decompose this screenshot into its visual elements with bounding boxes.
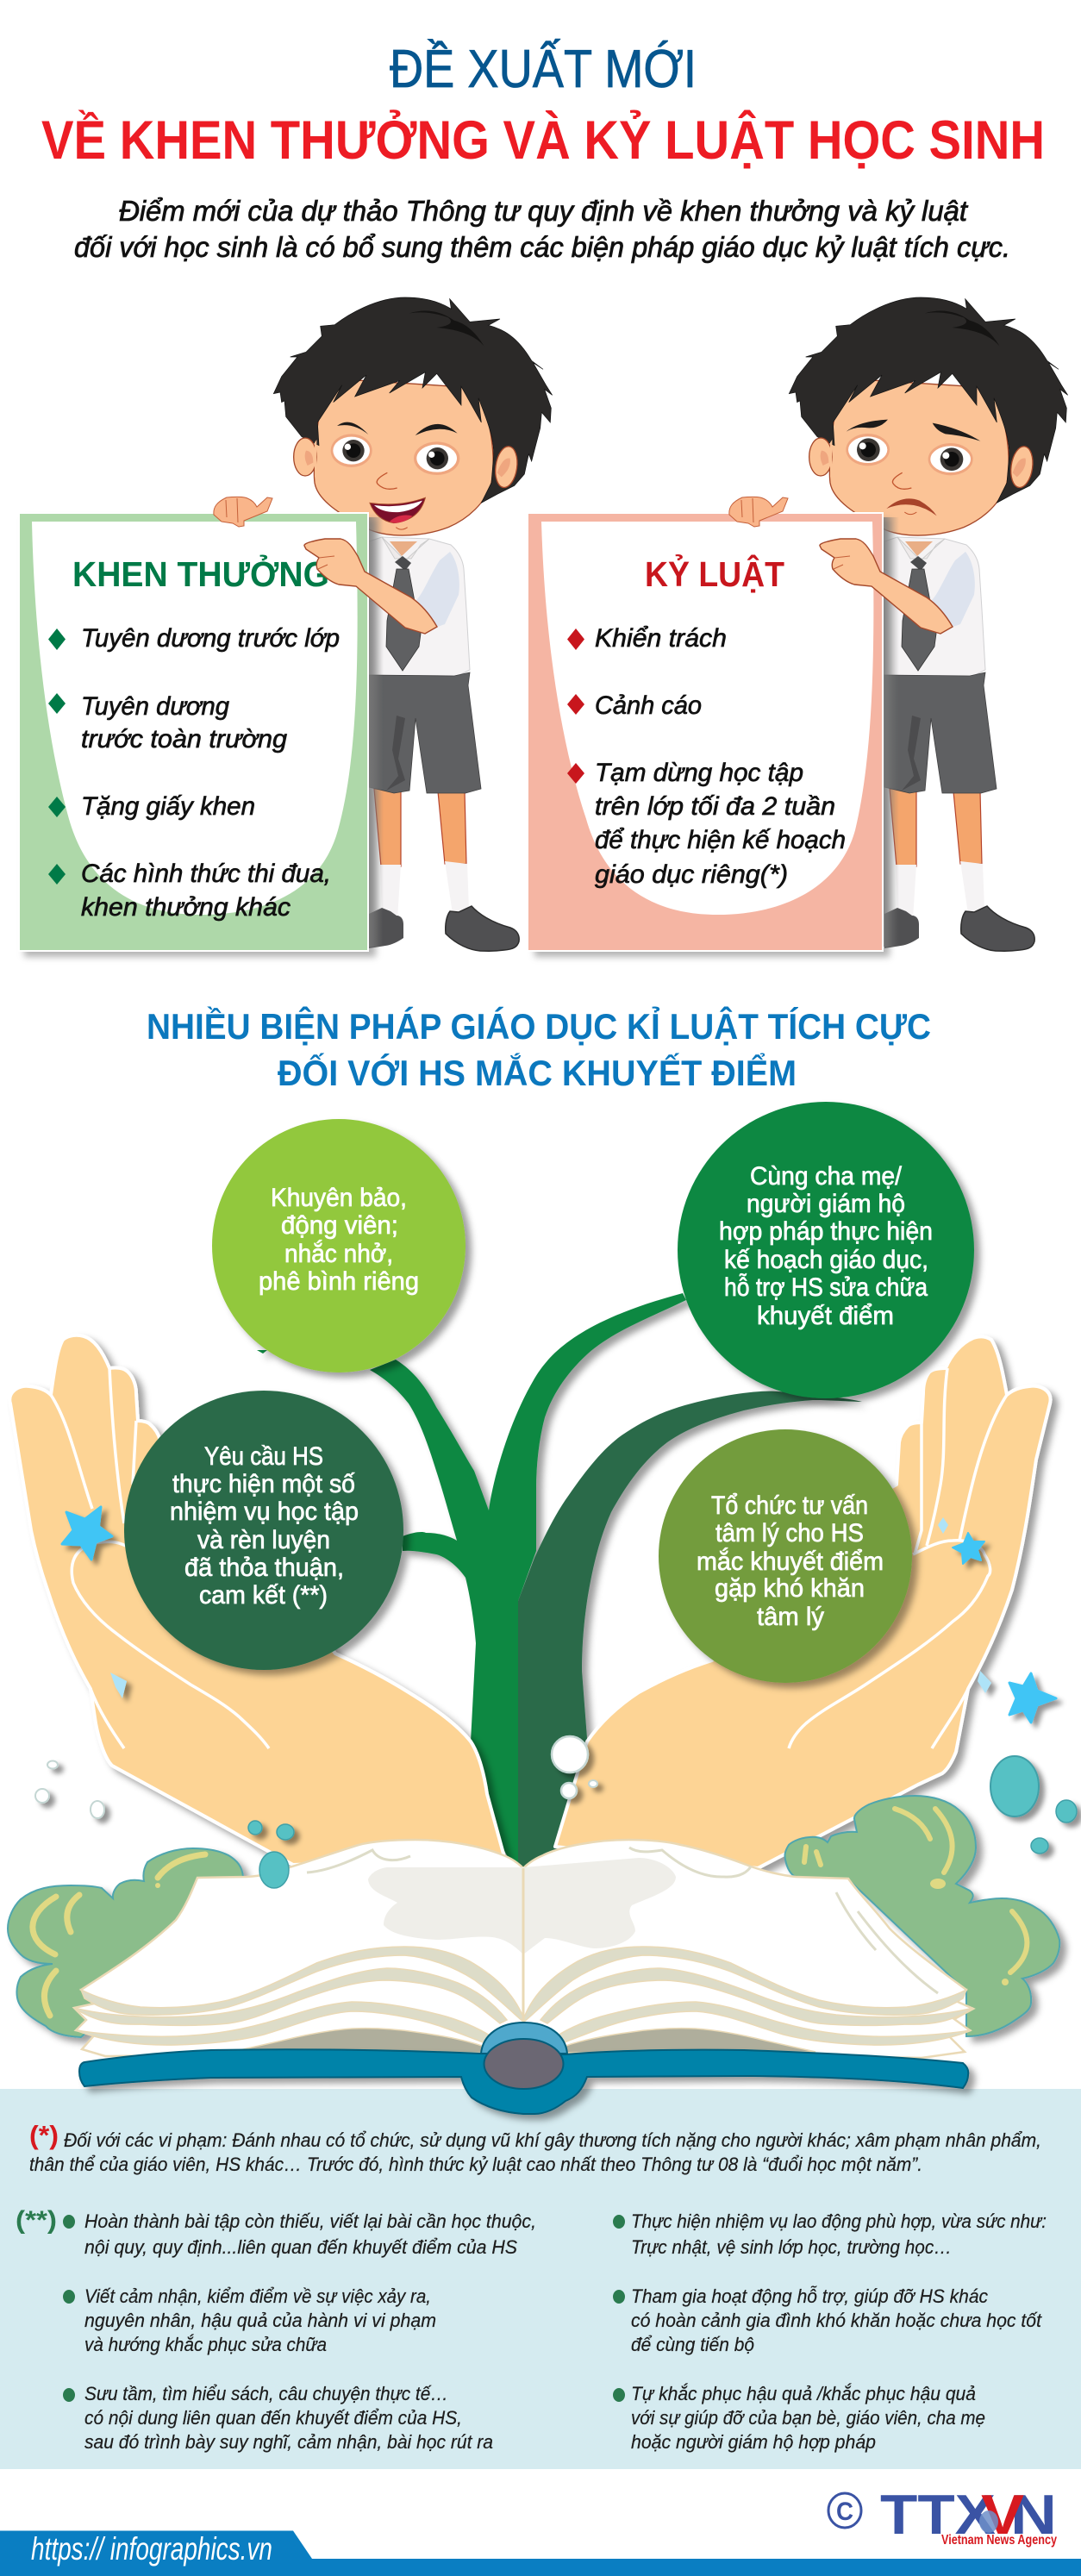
reward list: Tặng giấy khen — [81, 792, 255, 821]
boy arms holding panels — [214, 497, 953, 634]
footnote (**) right column: Trực nhật, vệ sinh lớp học, trường học… — [631, 2236, 952, 2258]
boy 2: sad student — [789, 297, 1068, 951]
circle: yeu cau HS: cam kết (**) — [199, 1581, 328, 1610]
right green cloud — [784, 1796, 1059, 2036]
reward list — [48, 624, 340, 922]
circle: cung cha me: hợp pháp thực hiện — [719, 1217, 933, 1246]
circle: khuyen bao: Khuyên bảo, — [271, 1184, 407, 1212]
discipline list — [567, 624, 846, 889]
circle: to chuc tu van: tâm lý — [757, 1603, 824, 1631]
left green cloud — [8, 1848, 243, 2037]
logo TTXVN: N — [1010, 2483, 1057, 2546]
panel heading: KỶ LUẬT — [645, 554, 784, 594]
intro text: đối với học sinh là có bổ sung thêm các biện pháp giáo dục kỷ luật tích cực. — [74, 231, 1010, 263]
footnote (**) left column: nguyên nhân, hậu quả của hành vi vi phạm — [84, 2310, 436, 2331]
footnote (**) left column: nội quy, quy định...liên quan đến khuyết điểm của HS — [84, 2236, 517, 2258]
boy 1: happy student — [273, 297, 553, 951]
circle: to chuc tu van: tâm lý cho HS — [715, 1519, 864, 1547]
footnote (**) right column — [613, 2210, 1047, 2453]
footnote (*): thân thể của giáo viên, HS khác… Trước đó, hình thức kỷ luật cao nhất theo Thông tư 08 là “đuổi học một năm”. — [29, 2154, 922, 2175]
footnote (*): Đối với các vi phạm: Đánh nhau có tổ chức, sử dụng vũ khí gây thương tích nặng cho người khác; xâm phạm nhân phẩm, — [64, 2129, 1041, 2151]
footnote background band — [0, 2089, 1081, 2469]
footnote (**) left column: Hoàn thành bài tập còn thiếu, viết lại bài cần học thuộc, — [84, 2210, 536, 2232]
footer bar — [0, 2531, 1081, 2576]
footnote (*): (*) — [29, 2120, 59, 2150]
reward list: Tuyên dương trước lớp — [81, 624, 340, 653]
book spine line — [522, 1868, 524, 2024]
circle: yeu cau HS: đã thỏa thuận, — [184, 1554, 344, 1582]
section heading: NHIỀU BIỆN PHÁP GIÁO DỤC KỈ LUẬT TÍCH CỰC — [147, 1005, 931, 1047]
reward list: trước toàn trường — [81, 725, 287, 753]
circle: yeu cau HS: thực hiện một số — [172, 1470, 355, 1498]
logo TTXVN — [828, 2483, 1057, 2548]
website url: https:// infographics.vn — [31, 2531, 272, 2567]
open book — [74, 1840, 973, 2114]
circle: khuyen bao: phê bình riêng — [259, 1267, 419, 1296]
circle: cung cha me: người giám hộ — [747, 1190, 905, 1218]
footnote (**) left column: có nội dung liên quan đến khuyết điểm của HS, — [84, 2407, 462, 2429]
circle: cung cha me: hỗ trợ HS sửa chữa — [724, 1273, 928, 1302]
footnote (**) right column: Tham gia hoạt động hỗ trợ, giúp đỡ HS khác — [631, 2285, 988, 2307]
footnote (**) right column: Tự khắc phục hậu quả /khắc phục hậu quả — [631, 2383, 976, 2404]
circle: to chuc tu van: mắc khuyết điểm — [697, 1547, 884, 1576]
logo TTXVN: V — [981, 2483, 1024, 2546]
footnote (**) left column: (**) — [16, 2206, 57, 2235]
footnote (**) right column: để cùng tiến bộ — [631, 2334, 754, 2355]
icon: stars and sparkles — [62, 1507, 1056, 1723]
intro text: Điểm mới của dự thảo Thông tư quy định về khen thưởng và kỷ luật — [119, 195, 969, 227]
footnote (**) right column: với sự giúp đỡ của bạn bè, giáo viên, cha mẹ — [631, 2407, 985, 2429]
logo TTXVN: C — [836, 2498, 853, 2526]
logo TTXVN: TTX — [880, 2483, 996, 2546]
book smudge — [368, 1858, 676, 1954]
footnote (**) right column: có hoàn cảnh gia đình khó khăn hoặc chưa học tốt — [631, 2310, 1042, 2331]
circle: cung cha me — [678, 1102, 974, 1398]
footnote (**) left column: và hướng khắc phục sửa chữa — [84, 2334, 327, 2355]
circle: khuyen bao — [212, 1119, 466, 1372]
reward list: Các hình thức thi đua, — [81, 860, 331, 888]
footnote (**) left column — [16, 2206, 536, 2453]
teal bubble on page corner — [259, 1852, 289, 1888]
book cover — [79, 2049, 968, 2114]
circle: yeu cau HS: nhiệm vụ học tập — [170, 1497, 359, 1526]
footnote (**) right column: Thực hiện nhiệm vụ lao động phù hợp, vừa sức như: — [631, 2210, 1047, 2232]
footnote (**) left column: Sưu tầm, tìm hiểu sách, câu chuyện thực tế… — [84, 2383, 448, 2404]
circle: cung cha me: Cùng cha mẹ/ — [750, 1162, 903, 1191]
discipline list: Khiển trách — [595, 624, 727, 653]
discipline list: để thực hiện kế hoạch — [595, 826, 846, 854]
circle: khuyen bao: nhắc nhở, — [284, 1240, 393, 1268]
circle: khuyen bao: động viên; — [281, 1211, 398, 1240]
book spine cap — [481, 2023, 567, 2054]
footnote (**) left column: sau đó trình bày suy nghĩ, cảm nhận, bài học rút ra — [84, 2431, 493, 2453]
circle: cung cha me: kế hoạch giáo dục, — [724, 1246, 928, 1274]
footnote (**) right column: hoặc người giám hộ hợp pháp — [631, 2431, 876, 2453]
book spine end — [484, 2039, 564, 2089]
reward list: khen thưởng khác — [81, 893, 291, 922]
circle: to chuc tu van: Tổ chức tư vấn — [711, 1491, 868, 1520]
circle: to chuc tu van: gặp khó khăn — [715, 1574, 865, 1603]
circle: yeu cau HS: Yêu cầu HS — [204, 1442, 323, 1471]
footnote (**) left column: Viết cảm nhận, kiểm điểm về sự việc xảy ra, — [84, 2285, 431, 2307]
section heading — [147, 1005, 931, 1093]
circle: yeu cau HS: và rèn luyện — [197, 1526, 330, 1554]
circle: cung cha me: khuyết điểm — [757, 1302, 894, 1330]
panel heading: KHEN THƯỞNG — [72, 554, 329, 594]
panel: ky luat — [528, 513, 899, 957]
discipline list: Tạm dừng học tập — [595, 759, 803, 787]
discipline list: trên lớp tối đa 2 tuần — [595, 792, 835, 821]
reward list: Tuyên dương — [81, 692, 229, 721]
title line 1: ĐỀ XUẤT MỚI — [390, 40, 697, 99]
discipline list: Cảnh cáo — [595, 691, 702, 720]
plant stems — [257, 1293, 862, 1868]
page fold lines — [307, 1848, 938, 1993]
panel: khen thuong — [19, 513, 384, 957]
footnote (*) — [29, 2120, 1041, 2175]
book pages — [74, 1840, 973, 2058]
left hand — [9, 1335, 504, 1865]
circle: yeu cau HS — [124, 1391, 403, 1670]
intro text — [74, 195, 1010, 263]
section heading: ĐỐI VỚI HS MẮC KHUYẾT ĐIỂM — [278, 1052, 797, 1093]
right hand — [555, 1336, 1051, 1868]
bubbles — [35, 1736, 1077, 1854]
title — [41, 40, 1045, 171]
circle: to chuc tu van — [659, 1429, 912, 1683]
discipline list: giáo dục riêng(*) — [595, 860, 788, 889]
